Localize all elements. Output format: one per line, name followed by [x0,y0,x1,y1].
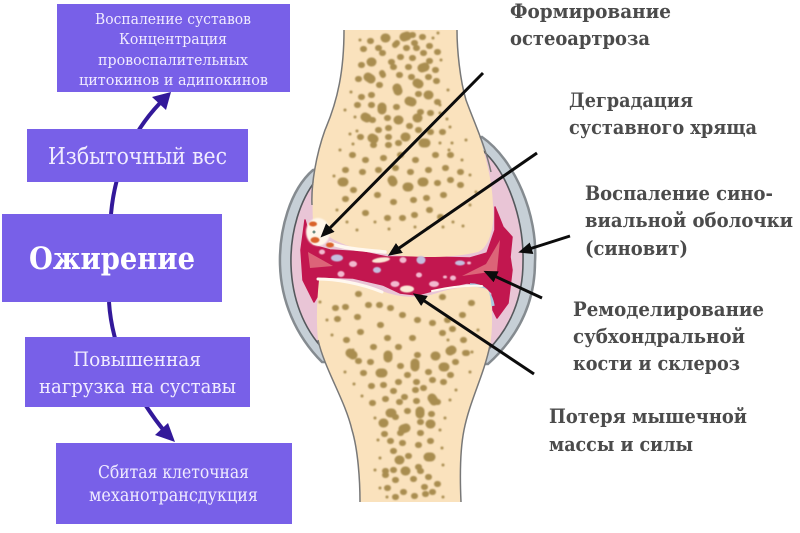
label: osteoarthritis formation: остеоартроза [510,27,650,50]
label: synovitis: (синовит) [585,237,688,260]
label: osteoarthritis formation [510,0,671,50]
box: joint inflammation: цитокинов и адипокинов [79,71,268,89]
box: excess weight: Избыточный вес [48,144,227,170]
label: muscle mass loss: массы и силы [549,433,693,456]
arrow: downward curve to mechanotransduction [109,302,175,442]
lower bone pores [320,294,478,497]
lower bone [317,279,492,502]
box: obesity: Ожирение [29,241,195,277]
arrow: synovitis [523,236,570,251]
box: joint inflammation: провоспалительных [98,51,249,69]
arrow: upward curve to inflammation [111,92,171,214]
arrow: subchondral remodelling [488,273,542,298]
label: subchondral remodelling: субхондральной [573,325,745,348]
diagram: knee joint cross-section [280,30,570,502]
joint capsule [280,137,535,364]
box: joint inflammation: Концентрация [119,30,227,48]
panel: obesity flow chart [2,4,292,524]
box: joint inflammation: Воспаление суставов [95,10,251,28]
box: joint load: нагрузка на суставы [39,374,236,398]
box: joint inflammation [57,4,290,92]
box: joint load: Повышенная [73,347,201,371]
arrow: osteoarthritis formation [324,73,483,234]
label: synovitis: Воспаление сино- [585,182,773,205]
label: cartilage degradation: суставного хряща [569,116,757,139]
arrow: cartilage degradation [392,153,537,253]
box: obesity [2,214,222,302]
box: excess weight [27,129,248,182]
label: cartilage degradation: Деградация [569,89,693,112]
label: muscle mass loss [549,405,747,456]
box: disrupted mechanotransduction: механотрансдукция [89,486,258,506]
label: osteoarthritis formation: Формирование [510,0,671,23]
label: subchondral remodelling: кости и склероз [573,352,740,375]
label: muscle mass loss: Потеря мышечной [549,405,747,428]
inflamed synovium [301,207,512,318]
label: synovitis [585,182,793,260]
box: disrupted mechanotransduction: Сбитая клеточная [98,463,249,483]
box: disrupted mechanotransduction [56,443,292,524]
synovial fluid vesicles [319,250,471,292]
box: joint load [25,337,250,407]
arrow: muscle loss [417,296,534,374]
articular cartilage highlights [318,243,482,292]
label: cartilage degradation [569,89,757,139]
upper bone pores [334,33,476,230]
label: subchondral remodelling [573,298,764,375]
label: subchondral remodelling: Ремоделирование [573,298,764,321]
osteophyte cells [306,218,334,248]
upper bone [312,30,493,257]
